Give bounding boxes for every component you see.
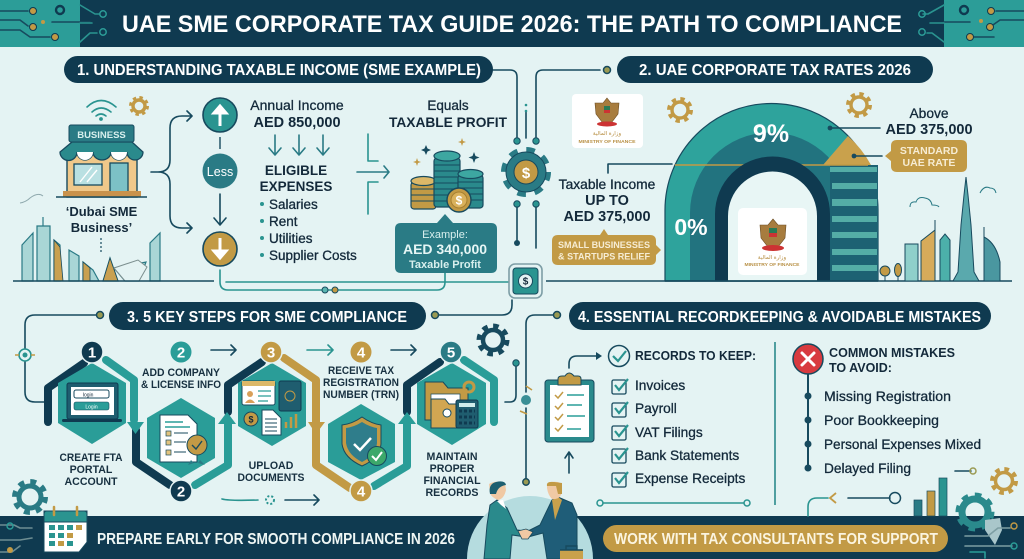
step labels: NUMBER (TRN) xyxy=(323,389,399,401)
logo: ministry of finance in arch xyxy=(738,208,807,275)
title: UAE SME CORPORATE TAX GUIDE 2026: THE PATH TO COMPLIANCE xyxy=(122,11,902,38)
text: eligible expenses: Rent xyxy=(269,214,298,229)
callout: up to threshold: UP TO xyxy=(585,193,629,209)
callout: above threshold: STANDARD xyxy=(900,145,958,157)
callout: up to threshold: Taxable Income xyxy=(559,177,656,192)
heading: common mistakes: COMMON MISTAKES xyxy=(829,346,955,360)
text: annual income: Annual Income xyxy=(250,97,344,113)
callout: up to threshold xyxy=(552,164,672,265)
panel: common mistakes xyxy=(793,344,981,476)
equals arrow xyxy=(357,134,389,214)
callout: example taxable profit: AED 340,000 xyxy=(403,241,487,257)
panel: taxable income xyxy=(13,97,507,281)
section 1 heading pill xyxy=(64,56,493,83)
step numbers: 4 xyxy=(357,344,366,362)
logo: ministry of finance in arch: وزارة المالية xyxy=(758,255,786,261)
step numbers: 4 xyxy=(357,484,366,500)
step 5 hexagon xyxy=(417,363,486,445)
step 2 hexagon xyxy=(147,398,215,478)
icon: gold gears xyxy=(669,94,870,121)
step labels: MAINTAIN xyxy=(426,451,478,463)
icon: gold gear xyxy=(130,98,148,114)
footer pill: WORK WITH TAX CONSULTANTS FOR SUPPORT xyxy=(614,531,938,548)
callout: up to threshold: & STARTUPS RELIEF xyxy=(558,252,650,262)
icon: dark gear xyxy=(479,326,507,354)
chart: tax rate arch: 9% xyxy=(753,120,789,148)
heading: common mistakes xyxy=(829,346,955,375)
mistakes list xyxy=(804,389,981,476)
logo: ministry of finance xyxy=(572,94,643,148)
logo: ministry of finance: وزارة المالية xyxy=(593,131,621,137)
text: taxable profit: TAXABLE PROFIT xyxy=(389,114,507,130)
step arrows xyxy=(211,345,416,505)
records checklist xyxy=(612,378,745,487)
step numbers: 3 xyxy=(267,344,275,362)
step 3 hexagon: $ xyxy=(248,414,254,424)
step 4 hexagon xyxy=(328,404,395,480)
step labels: PROPER xyxy=(430,463,475,475)
step numbers: 2 xyxy=(177,344,185,362)
text: Dubai SME Business: Business’ xyxy=(71,220,132,235)
step labels: ACCOUNT xyxy=(65,476,118,488)
mistakes list: Delayed Filing xyxy=(824,461,911,476)
icon: income up arrow xyxy=(203,98,237,132)
logo: ministry of finance: MINISTRY OF FINANCE xyxy=(578,139,636,145)
badge: Less: Less xyxy=(207,165,233,179)
text: annual income: AED 850,000 xyxy=(253,115,341,131)
icon: central dollar badge: $ xyxy=(523,276,529,288)
heading: records to keep: RECORDS TO KEEP: xyxy=(635,349,756,363)
step labels: ADD COMPANY xyxy=(142,367,220,379)
step labels: RECEIVE TAX xyxy=(328,365,394,377)
panel: tax rates xyxy=(546,94,1012,281)
mistakes list: Poor Bookkeeping xyxy=(824,413,939,428)
icon: central dollar gear xyxy=(504,150,548,194)
step labels: UPLOAD xyxy=(249,460,294,472)
right skyline xyxy=(546,177,1012,281)
icon: corner bars and gears xyxy=(808,468,1017,558)
section 3 heading pill xyxy=(109,302,426,330)
brace arrows xyxy=(151,111,192,233)
step labels: REGISTRATION xyxy=(323,377,399,389)
step labels: DOCUMENTS xyxy=(238,472,304,484)
panel: compliance steps xyxy=(48,341,494,505)
callout: above threshold: AED 375,000 xyxy=(885,122,973,138)
footer bar xyxy=(0,516,1024,559)
text: taxable profit: Equals xyxy=(427,98,469,113)
icon: left footer gear xyxy=(14,482,46,512)
callout: above threshold: Above xyxy=(909,106,949,121)
text: taxable profit xyxy=(389,98,507,130)
section 4 heading pill: 4. ESSENTIAL RECORDKEEPING & AVOIDABLE MISTAKES xyxy=(578,309,981,326)
callout: example taxable profit: Taxable Profit xyxy=(409,259,481,271)
text: eligible expenses: Supplier Costs xyxy=(269,248,357,263)
icon: central dollar badge xyxy=(509,264,542,298)
left skyline xyxy=(13,194,214,281)
icon: coin stacks xyxy=(411,138,483,212)
callout: above threshold: UAE RATE xyxy=(903,157,955,169)
callout: example taxable profit: Example: xyxy=(422,229,468,241)
handshake illustration xyxy=(467,481,593,559)
section 2 heading pill xyxy=(617,56,933,83)
icon: check circle xyxy=(608,346,630,366)
icon: clipboard xyxy=(545,373,594,442)
step labels: RECORDS xyxy=(426,487,478,499)
text: eligible expenses: Utilities xyxy=(269,231,313,246)
callout: above threshold xyxy=(828,106,973,172)
icon: central dollar gear: $ xyxy=(522,165,531,182)
icon: wifi xyxy=(87,100,116,121)
step labels: & LICENSE INFO xyxy=(141,379,221,391)
mistakes list: Missing Registration xyxy=(824,389,951,404)
text: eligible expenses: ELIGIBLE xyxy=(265,163,327,178)
step 1 hexagon xyxy=(58,363,126,444)
step 3 hexagon xyxy=(238,363,306,446)
text: Dubai SME Business xyxy=(66,204,138,235)
mistakes list: Personal Expenses Mixed xyxy=(824,437,981,452)
step numbers: 5 xyxy=(447,344,455,362)
records checklist: Payroll xyxy=(635,401,677,416)
footer message: PREPARE EARLY FOR SMOOTH COMPLIANCE IN 2026 xyxy=(97,531,455,548)
badge: Less xyxy=(202,154,238,188)
records checklist: Bank Statements xyxy=(635,448,739,463)
records checklist: VAT Filings xyxy=(635,425,703,440)
icon: calendar xyxy=(44,507,87,552)
icon: expense down arrow xyxy=(203,232,237,266)
heading: common mistakes: TO AVOID: xyxy=(829,361,892,375)
step 1 hexagon: Login xyxy=(85,404,98,410)
section 1 heading pill: 1. UNDERSTANDING TAXABLE INCOME (SME EXAMPLE) xyxy=(77,62,481,79)
records checklist: Invoices xyxy=(635,378,685,393)
ribbon path xyxy=(48,358,494,488)
records checklist: Expense Receipts xyxy=(635,471,745,486)
text: eligible expenses: EXPENSES xyxy=(260,179,332,194)
icon: storefront: BUSINESS xyxy=(77,130,126,141)
icon: storefront xyxy=(56,125,147,197)
step labels: CREATE FTA xyxy=(60,452,123,464)
section 4 heading pill xyxy=(569,302,991,330)
step labels xyxy=(60,365,481,499)
text: eligible expenses xyxy=(260,163,357,263)
step 1 hexagon: Iogin xyxy=(83,392,94,398)
logo: ministry of finance in arch: MINISTRY OF FINANCE xyxy=(744,262,800,268)
down arrows xyxy=(269,135,329,155)
section 3 heading pill: 3. 5 KEY STEPS FOR SME COMPLIANCE xyxy=(127,309,407,326)
callout: up to threshold: SMALL BUSINESSES xyxy=(558,240,650,251)
section 2 heading pill: 2. UAE CORPORATE TAX RATES 2026 xyxy=(639,62,911,79)
icon: red cross xyxy=(793,344,823,374)
chart: tax rate arch: 0% xyxy=(674,214,708,240)
step numbers: 2 xyxy=(177,484,185,500)
step labels: PORTAL xyxy=(70,464,113,476)
step numbers xyxy=(81,341,462,502)
callout: up to threshold: AED 375,000 xyxy=(563,209,651,225)
step numbers: 1 xyxy=(88,344,96,362)
chart: tax rate arch xyxy=(665,104,878,281)
footer pill xyxy=(603,525,948,552)
text: Dubai SME Business: ‘Dubai SME xyxy=(66,204,138,219)
step labels: FINANCIAL xyxy=(423,475,481,487)
icon: coin stacks: $ xyxy=(456,194,463,208)
text: eligible expenses: Salaries xyxy=(269,197,318,212)
connector lines between sections xyxy=(15,66,610,485)
callout: example taxable profit xyxy=(395,214,497,273)
text: annual income xyxy=(250,97,344,131)
header banner xyxy=(0,0,1024,47)
arrows to list xyxy=(565,352,602,473)
panel: records to keep xyxy=(545,346,756,506)
